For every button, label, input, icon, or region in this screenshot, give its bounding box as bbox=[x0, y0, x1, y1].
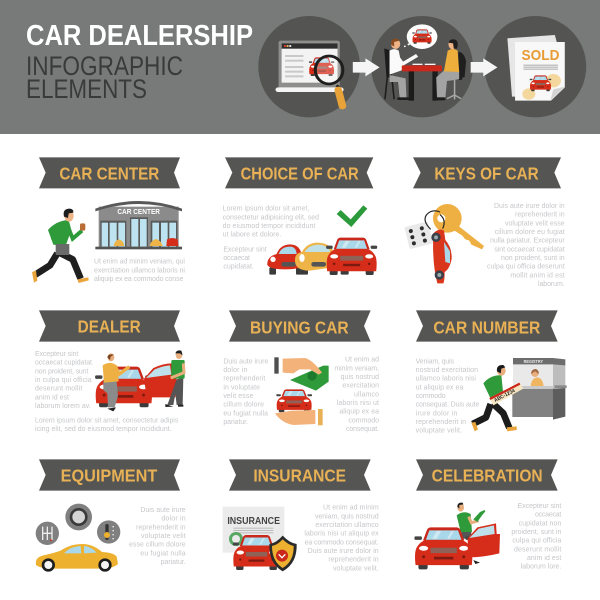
panel: keys of car bbox=[404, 157, 565, 288]
text block: left: eu fugiat nulla bbox=[223, 410, 268, 417]
subtitle bbox=[26, 51, 183, 104]
text block: nulla pariatur. Excepteur bbox=[490, 238, 565, 245]
icon: three cars bbox=[267, 238, 377, 275]
icon: man with licence plate: ABC-1234 bbox=[493, 388, 516, 404]
text block: cupidatat non bbox=[519, 520, 561, 527]
text block: voluptate velit. bbox=[416, 428, 462, 435]
icon: check mark bbox=[337, 205, 367, 227]
icon: shield bbox=[269, 536, 297, 571]
text block: right: commodo bbox=[348, 417, 379, 424]
text block: esse cillum dolore bbox=[129, 542, 186, 549]
text block: left bbox=[223, 358, 268, 426]
text block: veniam, quis nostrud bbox=[315, 513, 379, 520]
text block: Lorem ipsum dolor sit amet, consectetur adipis bbox=[35, 417, 179, 424]
text block: sint occaecat cupidatat bbox=[494, 246, 565, 253]
text block: cillum dolore eu fugiat bbox=[495, 229, 565, 236]
text block bbox=[35, 351, 179, 433]
circle: online search bbox=[258, 16, 360, 117]
banner: choice of car bbox=[225, 157, 373, 188]
banner: keys of car bbox=[413, 157, 561, 188]
text block: occaecat bbox=[223, 255, 250, 262]
text block: consequat. Duis aute bbox=[416, 402, 479, 409]
text block: Excepteur sint bbox=[35, 351, 78, 358]
text block: Excepteur sint bbox=[518, 503, 561, 510]
icon: yellow car bbox=[36, 544, 118, 572]
text block: left: reprehenderit bbox=[223, 376, 265, 383]
text block: pariatur. bbox=[161, 559, 186, 566]
icon: dealer and customer at red car bbox=[95, 350, 185, 411]
text block: right: minim veniam, bbox=[334, 365, 379, 372]
icon: automatic selector bbox=[97, 520, 120, 544]
banner: choice of car: CHOICE OF CAR bbox=[241, 163, 359, 183]
text block: Duis aute irure dolor in bbox=[494, 203, 565, 210]
panel: buying car bbox=[223, 310, 379, 433]
text block bbox=[304, 505, 379, 572]
text block: left: in voluptate bbox=[223, 384, 260, 391]
text block: ut labore et dolore. bbox=[223, 232, 281, 239]
text block: irure dolor in bbox=[416, 410, 457, 417]
text block: non proident, sunt bbox=[35, 368, 88, 375]
subtitle: INFOGRAPHIC bbox=[26, 51, 183, 81]
text block: right: Ut enim ad bbox=[345, 357, 379, 364]
text block: laborum. bbox=[538, 281, 565, 288]
icon: red car on hand bbox=[275, 389, 323, 425]
text block: reprehenderit in bbox=[515, 212, 565, 219]
text block: non proident, sunt in bbox=[501, 255, 565, 262]
text block: voluptate velit bbox=[141, 533, 186, 540]
icon: car keys bbox=[404, 204, 484, 283]
banner: keys of car: KEYS OF CAR bbox=[434, 163, 539, 183]
panel: dealer bbox=[35, 310, 185, 433]
text block: laborum lorem av. bbox=[35, 403, 91, 410]
panel: equipment bbox=[36, 459, 186, 572]
circle: negotiation bbox=[371, 16, 473, 117]
text block: right: consequat. bbox=[346, 426, 379, 433]
subtitle: ELEMENTS bbox=[26, 74, 147, 104]
text block: right bbox=[334, 357, 379, 433]
icon: registry booth bbox=[512, 358, 567, 420]
panel: insurance bbox=[223, 459, 379, 572]
text block: occaecat bbox=[535, 512, 561, 519]
icon: man with licence plate bbox=[471, 365, 523, 431]
text block: laborum lore. bbox=[521, 564, 561, 571]
text block: Veniam, quis bbox=[416, 358, 454, 365]
text block bbox=[94, 259, 185, 283]
banner: celebration bbox=[416, 459, 558, 491]
text block: anim id est bbox=[35, 394, 69, 401]
text block: Duis aute irure dolor in bbox=[308, 548, 379, 555]
text block: left: velit esse bbox=[223, 393, 253, 400]
panel: choice of car bbox=[223, 157, 377, 275]
icon: gear shift bbox=[36, 522, 59, 545]
panel: celebration bbox=[414, 459, 561, 571]
text block: ut aliquip ex ea bbox=[416, 384, 463, 391]
text block: left: cillum dolore bbox=[223, 402, 264, 409]
text block: culpa qui officia bbox=[512, 538, 561, 545]
text block: reprehenderit in bbox=[328, 557, 379, 564]
banner: car number: CAR NUMBER bbox=[433, 317, 541, 337]
text block: voluptate velit esse bbox=[505, 220, 565, 227]
text block bbox=[129, 507, 186, 566]
text block bbox=[416, 358, 479, 435]
header illustrations bbox=[258, 16, 586, 117]
text block: consectetur adipisicing elit, sed bbox=[223, 214, 319, 221]
icon: registry booth: REGISTRY bbox=[524, 359, 543, 364]
text block: deserunt mollit bbox=[35, 386, 82, 393]
icon: red car bbox=[233, 535, 280, 570]
icon: insurance document: INSURANCE bbox=[227, 516, 280, 527]
panel: car center bbox=[32, 157, 185, 283]
arrow: search to negotiation bbox=[353, 58, 380, 76]
text block: exercitation ullamco laboris ni bbox=[94, 267, 185, 274]
icon: wheel bbox=[65, 504, 92, 530]
title: CAR DEALERSHIP bbox=[26, 20, 253, 52]
text block: ea commodo consequat. bbox=[305, 539, 379, 546]
banner: dealer bbox=[39, 310, 180, 342]
icon: hand with money bbox=[274, 357, 329, 391]
icon: running man bbox=[32, 209, 89, 283]
icon: car center building: CAR CENTER bbox=[117, 207, 161, 216]
text block: anim id est bbox=[527, 555, 561, 562]
text block: right: laboris nisi ut bbox=[337, 400, 379, 407]
text block: icing elit, sed do eiusmod tempor incididunt. bbox=[35, 426, 172, 433]
text block: left: pariatur. bbox=[223, 419, 248, 426]
text block: aliquip ex ea commodo conse bbox=[94, 276, 183, 283]
text block: cupidatat. bbox=[223, 264, 254, 271]
circle: sold document: SOLD bbox=[522, 48, 559, 64]
text block: right: quis nostrud bbox=[341, 374, 379, 381]
text block: Ut enim ad minim veniam, qui bbox=[94, 259, 185, 266]
banner: insurance: INSURANCE bbox=[253, 466, 346, 486]
text block: in culpa qui officia bbox=[35, 377, 92, 384]
banner: celebration: CELEBRATION bbox=[432, 466, 543, 486]
text block: occaecat cupidatat bbox=[35, 360, 92, 367]
banner: car center: CAR CENTER bbox=[59, 163, 160, 183]
banner: dealer: DEALER bbox=[78, 317, 141, 337]
text block: proident, sunt in bbox=[511, 529, 561, 536]
text block: nostrud exercitation bbox=[416, 367, 478, 374]
banner: car number bbox=[416, 310, 558, 342]
text block: reprehenderit in bbox=[416, 419, 466, 426]
text block: right: ullamco bbox=[354, 391, 379, 398]
text block: right: exercitation bbox=[342, 383, 379, 390]
text block: voluptate velit. bbox=[333, 565, 379, 572]
banner: buying car: BUYING CAR bbox=[250, 317, 349, 337]
banner: buying car bbox=[229, 310, 371, 342]
banner: equipment: EQUIPMENT bbox=[61, 466, 158, 486]
text block: reprehenderit in bbox=[136, 524, 186, 531]
header band bbox=[0, 0, 600, 134]
text block bbox=[487, 203, 565, 288]
text block: Excepteur sint bbox=[223, 246, 267, 253]
text block: left: dolor in bbox=[223, 367, 247, 374]
panel: car number bbox=[416, 310, 567, 435]
banner: equipment bbox=[39, 459, 180, 491]
text block: Ut enim ad minim bbox=[323, 505, 379, 512]
arrow: negotiation to sold bbox=[471, 58, 497, 76]
text block: commodo bbox=[416, 393, 446, 400]
circle: sold document bbox=[484, 16, 586, 117]
text block: mollit anim id est bbox=[510, 272, 565, 279]
text block: eu fugiat nulla bbox=[140, 550, 186, 557]
text block: exercitation ullamco bbox=[315, 522, 379, 529]
text block bbox=[223, 206, 319, 271]
text block: culpa qui officia deserunt bbox=[487, 264, 565, 271]
text block bbox=[511, 503, 561, 571]
text block: left: Duis aute irure bbox=[223, 358, 268, 365]
text block: deserunt mollit bbox=[514, 546, 561, 553]
icon: man with champagne and red car bbox=[414, 503, 500, 569]
text block: dolor in bbox=[161, 516, 186, 523]
text block: do eiusmod tempor incididunt bbox=[223, 223, 315, 230]
banner: car center bbox=[39, 157, 180, 188]
banner: insurance bbox=[229, 459, 371, 491]
icon: insurance document bbox=[223, 507, 284, 553]
icon: car center building bbox=[95, 201, 182, 249]
text block: Duis aute irure bbox=[140, 507, 186, 514]
text block: laboris nisi ut aliquip ex bbox=[304, 531, 379, 538]
text block: ullamco laboris nisi bbox=[416, 376, 476, 383]
text block: Lorem ipsum dolor sit amet, bbox=[223, 206, 309, 213]
text block: right: aliquip ex ea bbox=[339, 409, 379, 416]
